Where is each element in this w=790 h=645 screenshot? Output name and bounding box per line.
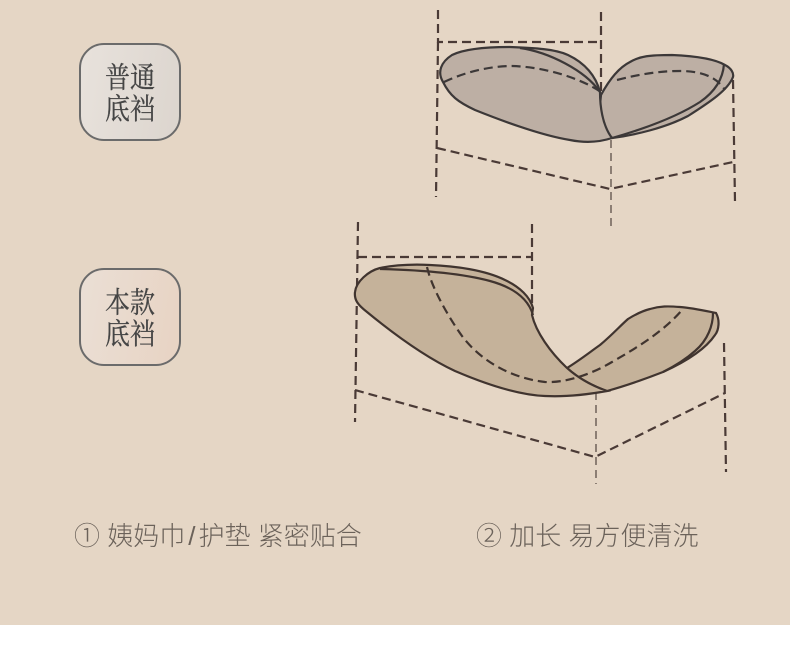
label: this product gusset [79,268,181,366]
regular gusset centre guide [610,140,612,226]
caption: sanitary pad fit: ① 姨妈巾/护垫 紧密贴合 [74,521,362,551]
label: regular gusset: 底裆 [105,95,155,126]
regular gusset guide lines [436,10,735,202]
regular gusset hidden seam [444,66,725,92]
diagram: regular gusset [436,10,735,226]
label: this product gusset: 底裆 [105,320,155,351]
product gusset centre guide [595,392,597,484]
product gusset shape [355,265,719,396]
product gusset guide lines [355,222,726,472]
label: this product gusset: 本款 [105,288,155,320]
label: regular gusset [79,43,181,141]
regular gusset shape [440,47,733,142]
product gusset hidden seam [427,267,682,382]
caption: extended length: ② 加长 易方便清洗 [476,521,698,551]
diagram: this product gusset [355,222,726,484]
label: regular gusset: 普通 [105,63,155,95]
